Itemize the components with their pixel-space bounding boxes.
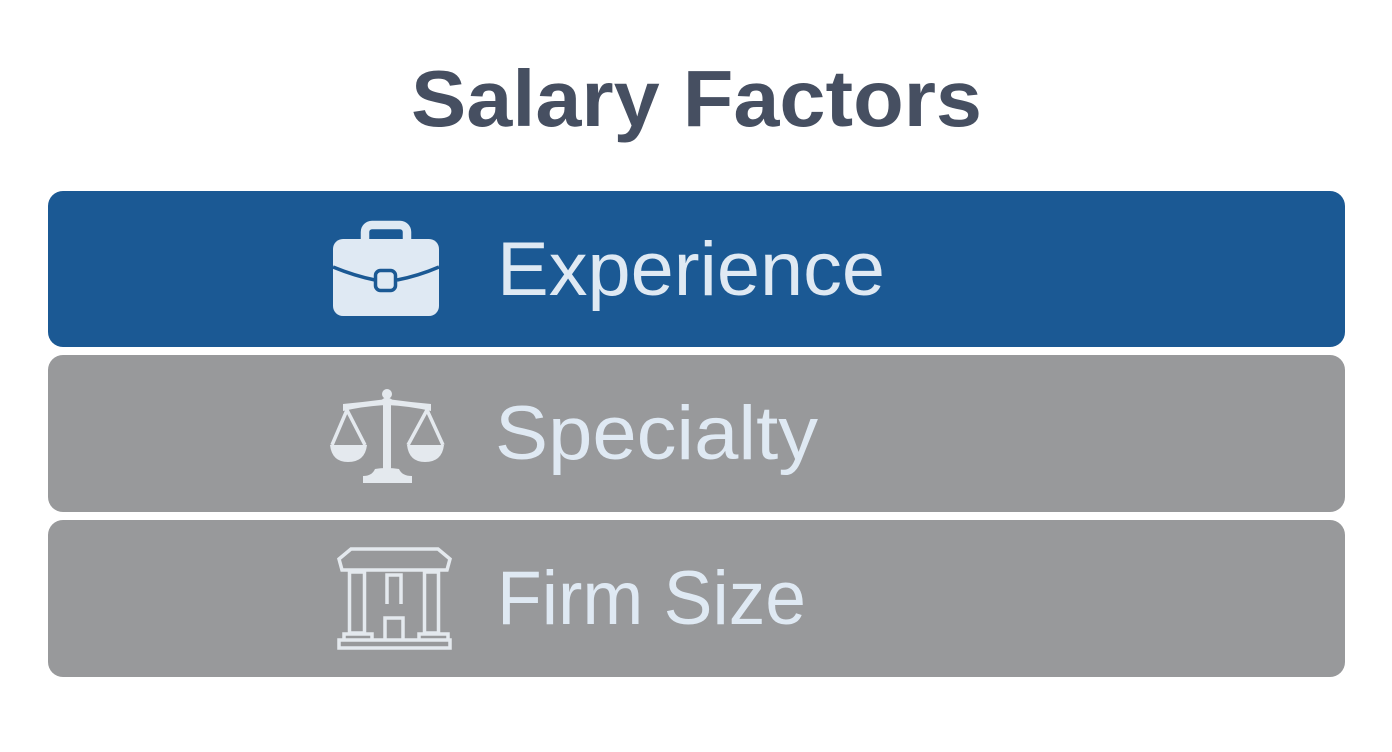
title: Salary Factors xyxy=(411,54,982,143)
panel: experience xyxy=(48,191,1345,347)
bar: experience xyxy=(48,191,1345,347)
icon: courthouse building xyxy=(339,549,450,648)
bar: firm size xyxy=(48,520,1345,677)
icon: scales of justice xyxy=(330,389,444,483)
bar: specialty xyxy=(48,355,1345,512)
label: specialty: Specialty xyxy=(495,391,818,476)
label: firm size: Firm Size xyxy=(497,556,806,641)
icon: briefcase xyxy=(333,225,439,316)
panel: specialty xyxy=(48,355,1345,512)
label: experience: Experience xyxy=(497,227,885,312)
panel: firm size xyxy=(48,520,1345,677)
